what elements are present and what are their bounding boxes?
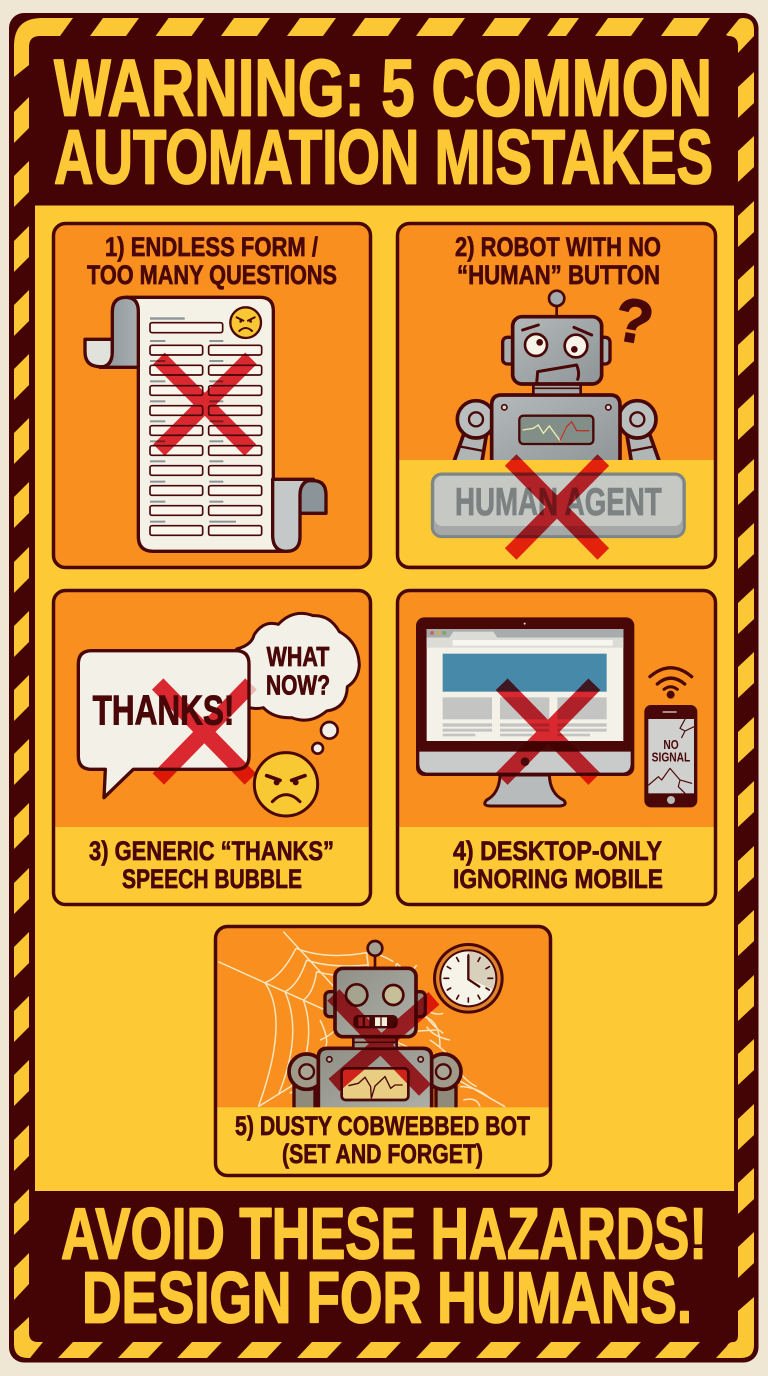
button: human agent <box>432 474 684 537</box>
panel 5: dusty bot <box>216 926 550 1176</box>
icon: confused robot <box>395 285 718 567</box>
icon: wifi and cracked phone: SIGNAL <box>652 751 691 765</box>
icon: wifi and cracked phone <box>644 668 697 807</box>
heading 3: 3) GENERIC “THANKS” <box>89 836 334 866</box>
icon: desktop monitor <box>403 605 643 827</box>
heading 4: 4) DESKTOP-ONLY <box>453 836 662 866</box>
yellow band <box>395 460 718 567</box>
heading 3: SPEECH BUBBLE <box>122 864 302 894</box>
heading 1: TOO MANY QUESTIONS <box>87 260 337 290</box>
thought cloud <box>237 613 359 720</box>
icon: scroll form <box>85 297 326 551</box>
icon: speech bubble and angry face <box>78 613 359 816</box>
icon: speech bubble and angry face: THANKS! <box>93 686 234 733</box>
icon: cobwebbed robot <box>216 927 550 1175</box>
heading 2 <box>455 232 661 290</box>
heading 3 <box>89 836 334 894</box>
panel 2: robot with no human button <box>395 224 718 568</box>
heading 1: 1) ENDLESS FORM / <box>105 232 318 262</box>
yellow band <box>216 1107 550 1175</box>
icon: confused robot: ? <box>609 285 658 359</box>
icon: speech bubble and angry face: NOW? <box>266 669 330 700</box>
heading 5: 5) DUSTY COBWEBBED BOT <box>235 1111 530 1141</box>
icon: speech bubble and angry face: WHAT <box>267 641 329 672</box>
heading 2: 2) ROBOT WITH NO <box>455 232 661 262</box>
title <box>54 44 713 200</box>
panel 3: generic thanks bubble <box>54 590 370 904</box>
heading 5: (SET AND FORGET) <box>282 1139 483 1169</box>
footer slogan <box>61 1194 707 1338</box>
heading 1 <box>87 232 337 290</box>
heading 2: “HUMAN” BUTTON <box>457 260 660 290</box>
panel 4: desktop only <box>398 590 716 904</box>
yellow content panel <box>35 206 734 1191</box>
icon: wall clock <box>433 943 504 1014</box>
panel 1: endless form <box>54 224 370 568</box>
heading 4 <box>453 836 663 894</box>
heading 5 <box>235 1111 530 1169</box>
heading 4: IGNORING MOBILE <box>453 864 663 894</box>
cobweb <box>218 932 505 1107</box>
icon: wifi and cracked phone: NO <box>663 738 679 752</box>
button: human agent: HUMAN AGENT <box>455 481 662 524</box>
